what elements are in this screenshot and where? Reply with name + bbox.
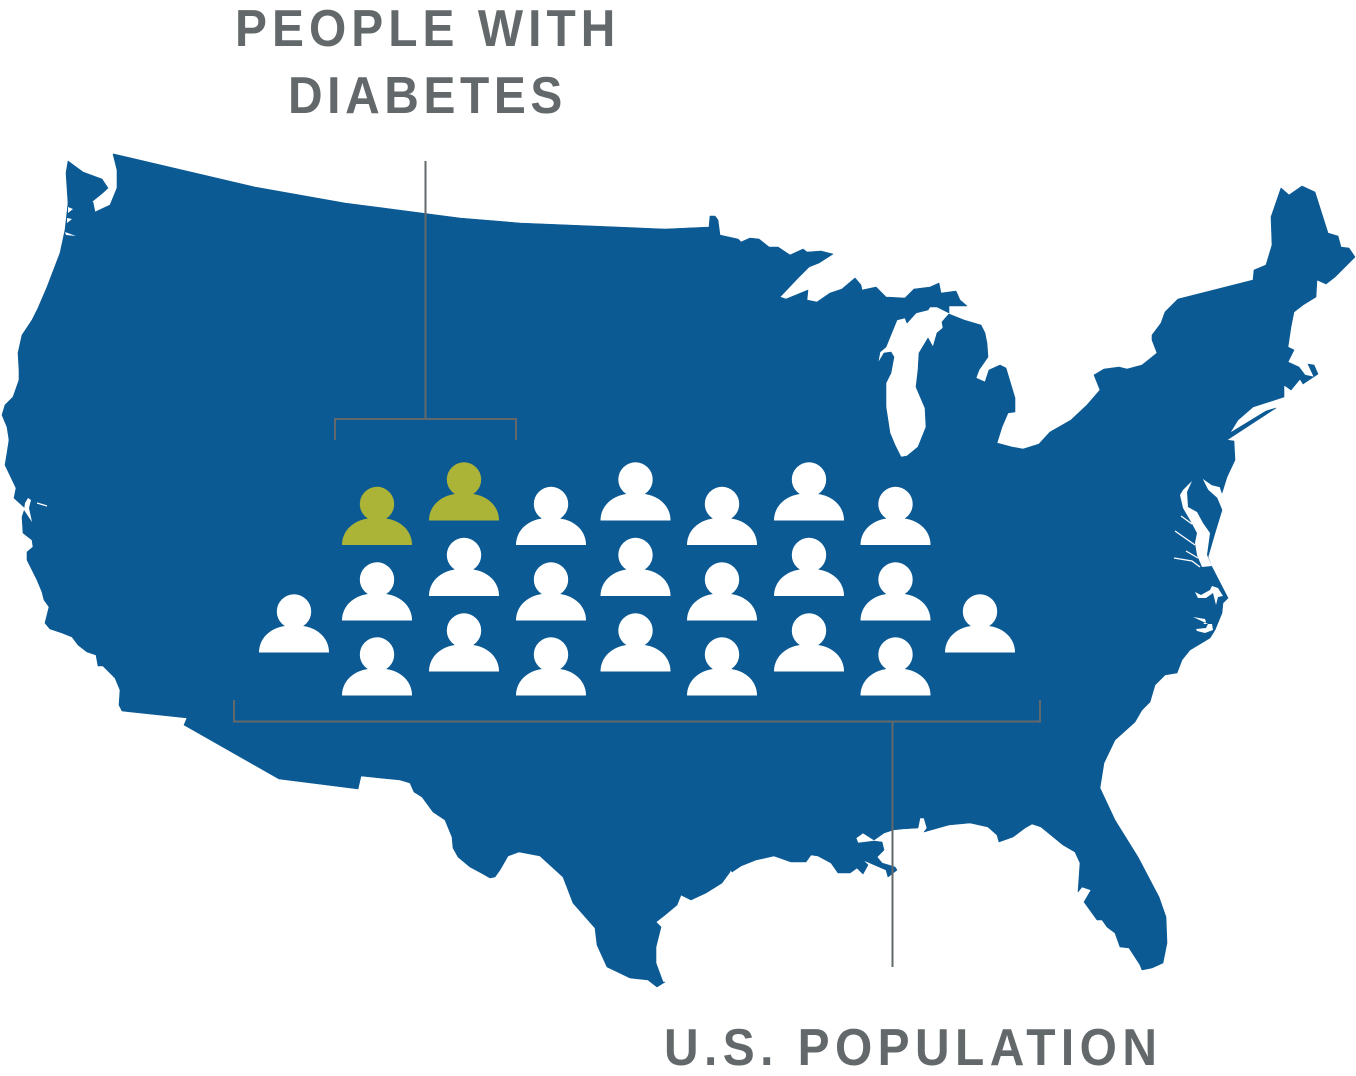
water: Chesapeake Bay	[1180, 481, 1212, 567]
bracket: people with diabetes	[335, 161, 516, 440]
heading: people with diabetes	[235, 0, 615, 124]
people: with diabetes (green)	[342, 462, 499, 545]
water: rivers and estuaries	[37, 190, 1200, 567]
bracket: U.S. population	[234, 700, 1040, 967]
heading: people with diabetes: PEOPLE WITH	[235, 0, 615, 57]
heading: people with diabetes: DIABETES	[288, 66, 562, 124]
people: rest of population (white)	[259, 462, 1015, 696]
heading: U.S. population: U.S. POPULATION	[664, 1018, 1157, 1076]
water: Pamlico and Albemarle sounds	[1193, 586, 1223, 633]
map: contiguous United States	[2, 154, 1355, 987]
water: Pacific inlets	[24, 207, 76, 522]
